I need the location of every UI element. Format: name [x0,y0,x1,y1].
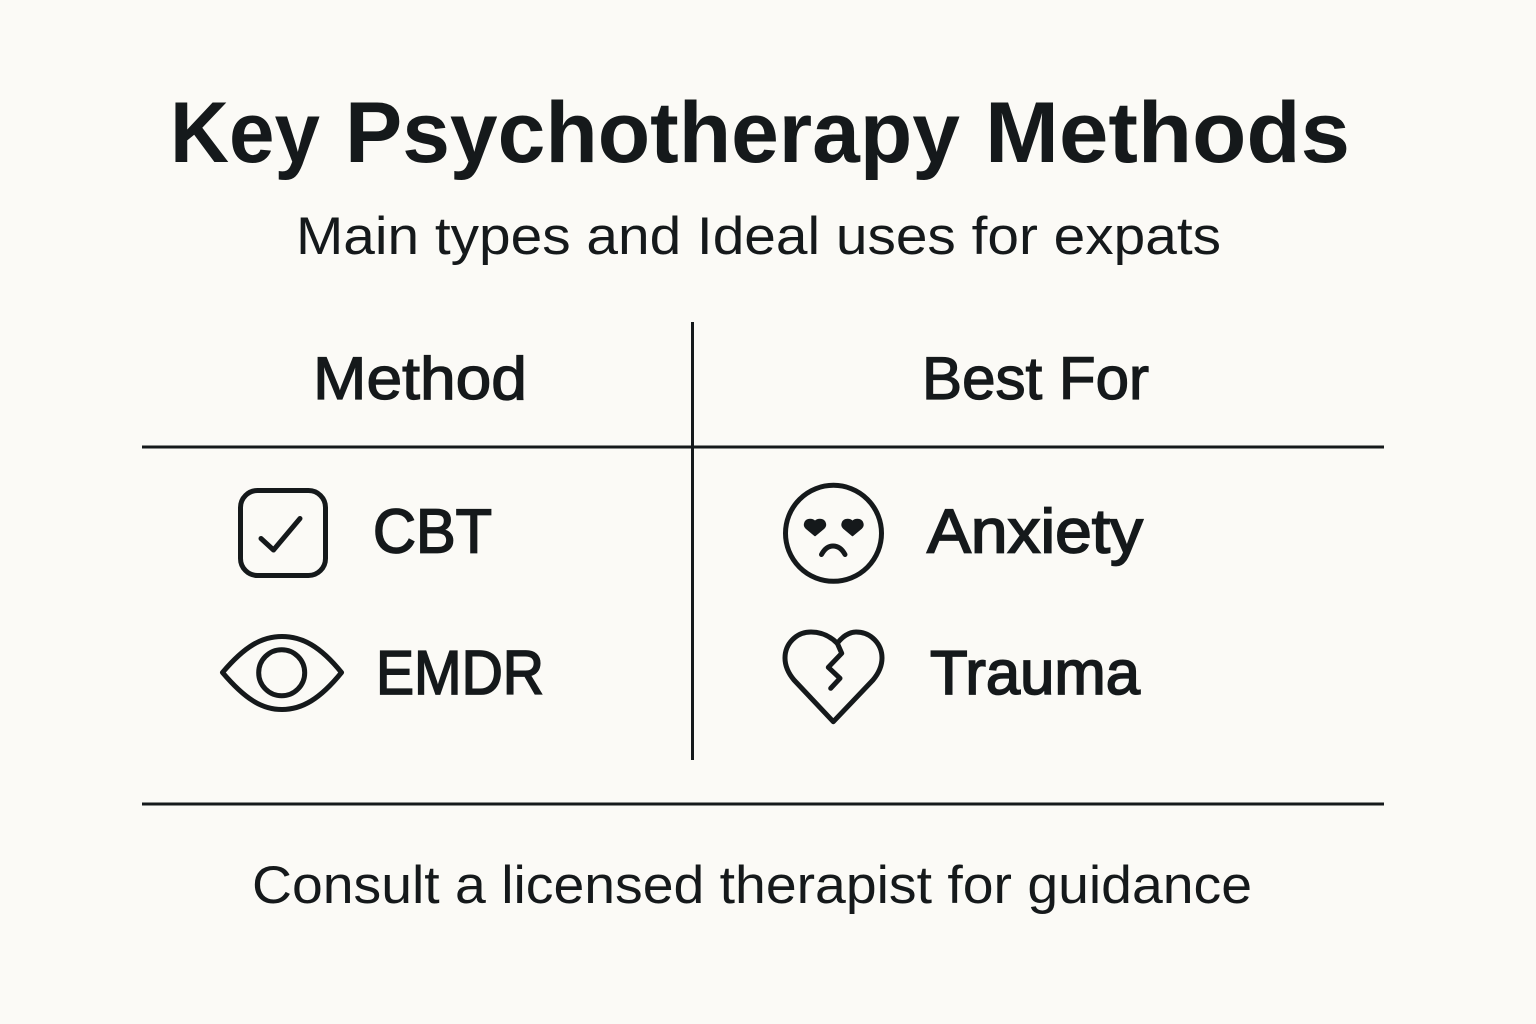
method label: EMDR: EMDR [376,639,544,708]
best-for label: Anxiety: Anxiety [927,498,1143,567]
column heading: Method: Method [313,345,527,412]
column heading: Best For: Best For [922,345,1149,412]
icon: broken heart [785,632,882,722]
title: Methods [985,85,1350,181]
best-for label: Trauma: Trauma [930,639,1141,708]
icon: checkbox [240,490,326,576]
title [170,85,1350,181]
title: Psychotherapy [345,85,960,181]
icon: sad face with heart eyes [786,485,882,581]
icon: eye [222,636,342,710]
table grid [142,322,1384,804]
title: Key [170,85,320,181]
method label: CBT: CBT [373,498,492,567]
footer note: Consult a licensed therapist for guidance [252,856,1252,915]
subtitle: Main types and Ideal uses for expats [296,207,1221,266]
